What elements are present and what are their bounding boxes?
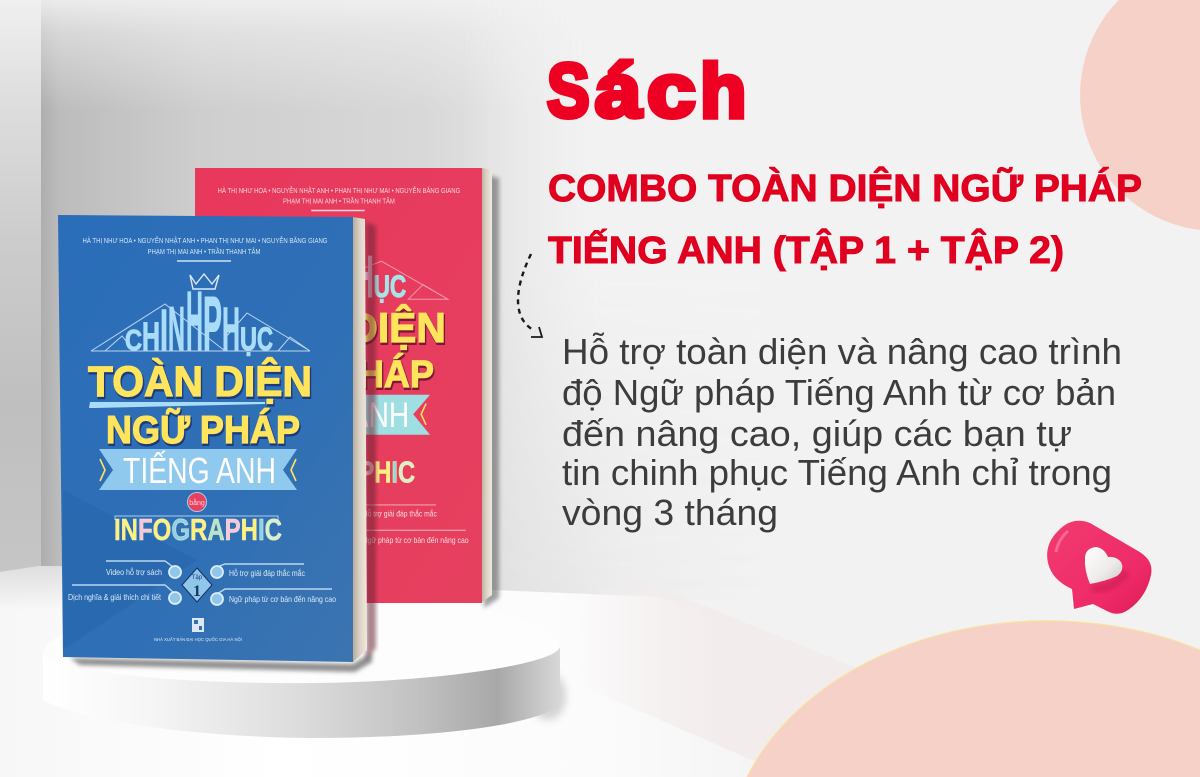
blue book badge: bang: bằng: [189, 498, 205, 507]
blue book authors: PHẠM THỊ MAI ANH • TRẦN THANH TÂM: [148, 246, 260, 256]
description text: [562, 331, 1122, 533]
description text: độ Ngữ pháp Tiếng Anh từ cơ bản: [562, 372, 1116, 413]
red book page edge: [481, 168, 492, 603]
blue book title: chinh phuc: N: [168, 295, 185, 364]
book: blue volume 1: [58, 215, 376, 672]
blue book badge: bang: [188, 492, 206, 512]
blue book title: chinh phuc: I: [160, 298, 168, 363]
blue book roof lines: [91, 304, 310, 351]
podium: [43, 600, 566, 738]
subtitle: [548, 166, 1142, 272]
decorative circle outline: [747, 621, 1200, 777]
blue book banner: tieng anh: TIẾNG ANH: [123, 450, 276, 491]
blue book cover shading: [63, 490, 197, 650]
blue book infographic word: INFOGRAPHIC: [114, 512, 282, 547]
red book features: Hỗ trợ giải đáp thắc mắc: [363, 509, 437, 519]
red book title art: TIẾNG ANH: [258, 395, 409, 435]
icon: crown: [190, 274, 219, 289]
blue book authors: HÀ THỊ NHƯ HOA • NGUYỄN NHẬT ANH • PHAN THỊ NHƯ MAI • NGUYỄN BĂNG GIANG: [82, 236, 328, 245]
blue book volume diamond: [182, 568, 212, 602]
book: red volume 2: [195, 168, 499, 608]
title: c: [647, 49, 696, 134]
red book features: Ngữ pháp từ cơ bản đến nâng cao: [363, 536, 469, 545]
blue book feature list: [68, 561, 336, 605]
description text: vòng 3 tháng: [562, 492, 778, 533]
title: á: [594, 49, 641, 134]
red book cover art: [218, 186, 469, 545]
red book title art: INFOGRAPHIC: [249, 456, 415, 489]
blue book page edge: [353, 217, 367, 662]
blue book title: chinh phuc: [125, 274, 273, 368]
blue book ribbon: [89, 402, 265, 408]
description text: tin chinh phục Tiếng Anh chỉ trong: [562, 452, 1112, 493]
blue book feature list: Hỗ trợ giải đáp thắc mắc: [229, 568, 305, 578]
blue book authors: [82, 236, 328, 256]
decorative circle bottom right: [747, 621, 1200, 777]
title: [546, 49, 746, 134]
subtitle: COMBO TOÀN DIỆN NGỮ PHÁP: [548, 166, 1142, 210]
blue book title: chinh phuc: H: [186, 274, 203, 368]
blue book feature list: Video hỗ trợ sách: [106, 567, 162, 577]
blue book volume diamond: 1: [193, 583, 201, 600]
blue book title: toan dien: TOÀN DIỆN: [89, 359, 313, 408]
description text: Hỗ trợ toàn diện và nâng cao trình: [562, 331, 1122, 372]
blue book feature list: Dịch nghĩa & giải thích chi tiết: [68, 592, 162, 602]
red book authors: HÀ THỊ NHƯ HOA • NGUYỄN NHẬT ANH • PHAN THỊ NHƯ MAI • NGUYỄN BĂNG GIANG: [218, 186, 460, 195]
red book title art: NGỮ PHÁP: [241, 354, 435, 398]
blue book title: chinh phuc: C: [125, 325, 142, 357]
icon: heart speech bubble: [1047, 521, 1151, 614]
decorative circle top right: [1080, 0, 1200, 230]
blue book publisher: NHÀ XUẤT BẢN ĐẠI HỌC QUỐC GIA HÀ NỘI: [154, 636, 242, 643]
subtitle: TIẾNG ANH (TẬP 1 + TẬP 2): [548, 228, 1064, 272]
blue book volume diamond: Tập: [192, 575, 203, 581]
blue book title: toan dien: TOÀN DIỆN: [88, 357, 312, 406]
red book authors: PHẠM THỊ MAI ANH • TRẦN THANH TÂM: [283, 196, 395, 206]
blue book title: chinh phuc: P: [203, 281, 222, 367]
red book title art: H: [356, 244, 374, 310]
red book title art: NGỮ PHÁP: [240, 352, 434, 396]
blue book title: chinh phuc: H: [222, 295, 240, 363]
red book authors: [218, 186, 460, 206]
red book title art: [365, 256, 450, 483]
red book title art: TOÀN DIỆN: [222, 303, 446, 351]
blue book feature list: Ngữ pháp từ cơ bản đến nâng cao: [229, 594, 336, 604]
blue book small divider: [177, 260, 231, 262]
red book cover: [195, 168, 482, 603]
blue book title: chinh phuc: H: [142, 315, 160, 359]
icon: white heart: [1085, 547, 1122, 584]
blue book title: chinh phuc: C: [257, 321, 273, 357]
arrow: dashed curve: [518, 254, 542, 337]
red book features: [366, 504, 468, 544]
blue book title: ngu phap: NGỮ PHÁP: [106, 408, 300, 452]
red book title art: ỤC: [374, 269, 406, 304]
blue book publisher: [154, 618, 242, 643]
background: [0, 0, 624, 777]
blue book cover: [58, 215, 353, 662]
title: S: [547, 49, 590, 134]
red book small divider: [311, 209, 365, 211]
blue book title: ngu phap: NGỮ PHÁP: [107, 410, 301, 454]
title: h: [700, 49, 746, 134]
description text: đến nâng cao, giúp các bạn tự: [562, 413, 1072, 454]
red book title art: TOÀN DIỆN: [223, 305, 447, 353]
blue book title: chinh phuc: Ụ: [240, 321, 257, 357]
